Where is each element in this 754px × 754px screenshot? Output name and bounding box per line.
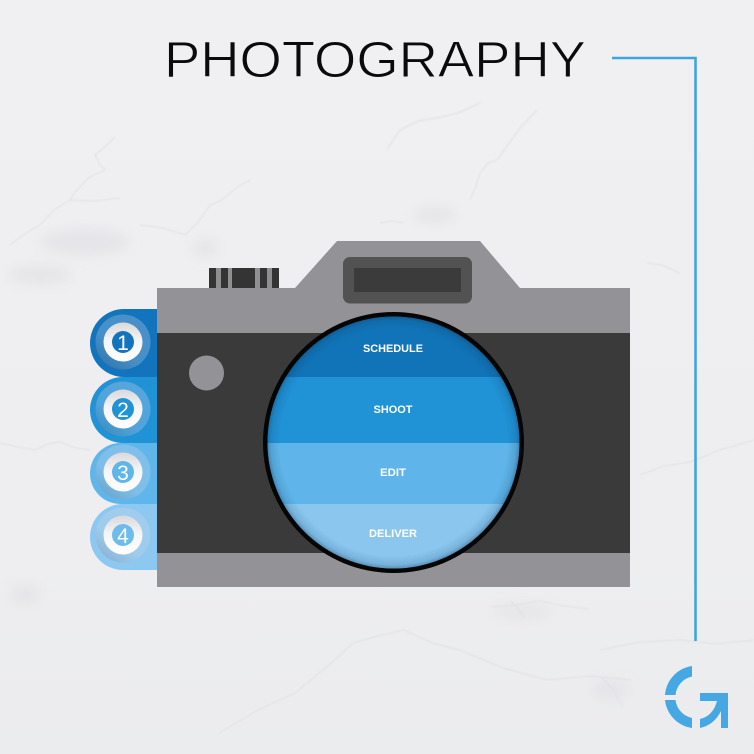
viewfinder: [343, 257, 472, 304]
connector line: [612, 58, 696, 641]
tab 1: [90, 309, 157, 377]
icon: G arrow logo: [665, 666, 728, 728]
lens label: shoot: SHOOT: [374, 404, 413, 416]
flash button: [189, 356, 224, 390]
step badge 3: 3: [117, 462, 129, 485]
step badge 3: [96, 444, 150, 500]
tab 3: [90, 443, 157, 504]
step badge 2: [96, 382, 150, 436]
camera body: [157, 241, 630, 587]
title: PHOTOGRAPHY: [164, 31, 586, 88]
step badge 4: [96, 508, 150, 562]
dark grip band: [157, 333, 630, 553]
lens with four process bands: [260, 310, 530, 573]
lens label: edit: EDIT: [380, 467, 406, 479]
tab 4: [90, 504, 157, 570]
step badge 2: 2: [117, 399, 129, 422]
lens label: deliver: DELIVER: [369, 528, 417, 540]
step badge 4: 4: [117, 525, 129, 548]
lens label: schedule: SCHEDULE: [363, 343, 423, 355]
step badge 1: [96, 314, 150, 370]
shutter dial: [209, 268, 279, 288]
step badge 1: 1: [117, 332, 129, 355]
step tabs: [90, 309, 157, 570]
tab 2: [90, 377, 157, 443]
camera: [157, 241, 630, 587]
